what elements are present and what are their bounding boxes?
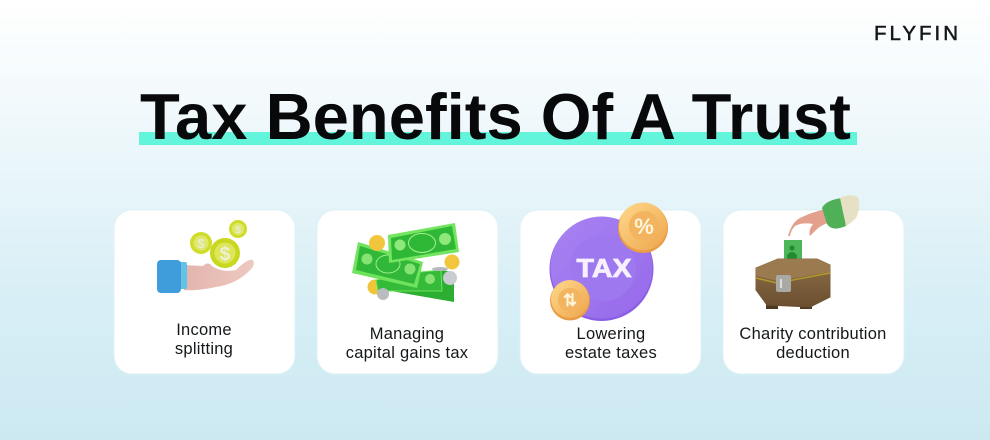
panel: income splitting xyxy=(114,210,295,374)
icon: hand with coins: $ xyxy=(235,225,241,236)
icon: hand with coins: $ xyxy=(197,236,205,251)
label: Income xyxy=(176,321,232,339)
title text: Tax Benefits Of A Trust xyxy=(140,80,851,153)
label: Charity contribution xyxy=(739,325,887,343)
icon: tax coin xyxy=(550,202,668,321)
icon: hand with coins xyxy=(157,220,254,293)
label: splitting xyxy=(175,340,233,358)
icon: hand dropping note into box xyxy=(756,195,859,309)
icon: tax coin: ⇅ xyxy=(563,291,577,310)
icon: money bills and coins xyxy=(352,223,460,302)
label: estate taxes xyxy=(565,344,657,362)
logo: FLYFIN: FLYFIN xyxy=(874,22,958,45)
label: Lowering xyxy=(577,325,645,343)
icon: tax coin: TAX xyxy=(576,253,632,283)
icon: hand with coins: $ xyxy=(220,244,231,265)
icon: tax coin: % xyxy=(634,214,654,239)
label: Managing xyxy=(370,325,444,343)
title highlight bar xyxy=(139,132,857,145)
panel: capital gains xyxy=(317,210,498,374)
panel: estate taxes xyxy=(520,202,701,374)
label: capital gains tax xyxy=(346,344,469,362)
panel: charity xyxy=(723,195,904,374)
label: deduction xyxy=(776,344,850,362)
title with highlight xyxy=(139,80,857,153)
